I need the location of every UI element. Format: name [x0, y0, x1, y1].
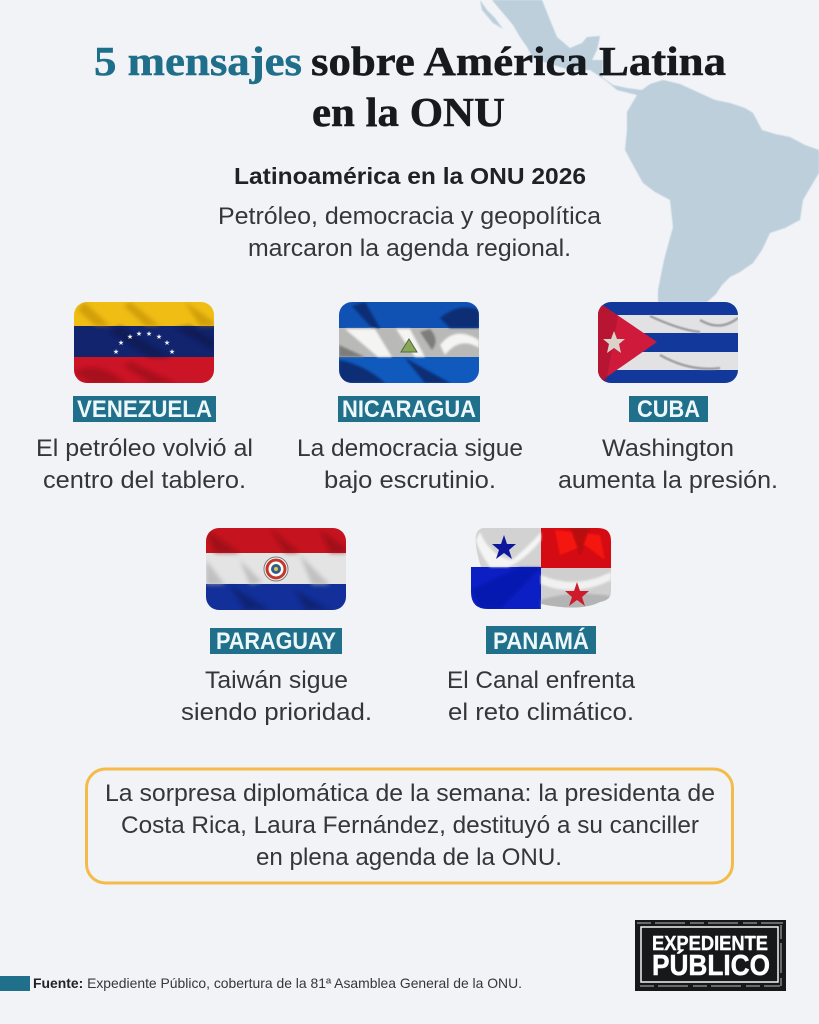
logo: Expediente Público: EXPEDIENTE — [652, 933, 768, 955]
label: Paraguay: PARAGUAY — [216, 628, 336, 655]
callout: en plena agenda de la ONU. — [256, 844, 562, 871]
intro text: marcaron la agenda regional. — [248, 235, 571, 262]
text: Paraguay — [181, 667, 372, 726]
source note: Fuente: Expediente Público, cobertura de la 81ª Asamblea General de la ONU. — [33, 975, 522, 991]
intro text — [218, 203, 602, 262]
label: Venezuela: VENEZUELA — [77, 396, 212, 423]
title: sobre América Latina — [311, 38, 726, 84]
text: Cuba: aumenta la presión. — [558, 467, 778, 494]
panel: Paraguay — [181, 528, 372, 726]
text: Panamá — [447, 667, 636, 726]
icon: flag of Nicaragua — [339, 302, 479, 383]
text: Paraguay: Taiwán sigue — [205, 667, 348, 694]
text: Venezuela: centro del tablero. — [43, 467, 246, 494]
text: Cuba: Washington — [602, 435, 734, 462]
icon: flag of Venezuela: ★ — [136, 330, 142, 338]
callout: La sorpresa diplomática de la semana: la presidenta de — [105, 780, 715, 807]
text: Panamá: el reto climático. — [448, 699, 634, 726]
text: Nicaragua — [297, 435, 523, 494]
title: 5 mensajes — [94, 38, 302, 84]
text: Panamá: El Canal enfrenta — [447, 667, 636, 694]
title — [94, 38, 726, 135]
callout — [86, 769, 732, 883]
label: Nicaragua: NICARAGUA — [342, 396, 476, 423]
panel: Venezuela — [36, 302, 253, 494]
text: Venezuela: El petróleo volvió al — [36, 435, 253, 462]
subtitle heading: Latinoamérica en la ONU 2026 — [234, 163, 586, 189]
callout: Costa Rica, Laura Fernández, destituyó a su canciller — [121, 812, 699, 839]
intro text: Petróleo, democracia y geopolítica — [218, 203, 602, 230]
logo: Expediente Público — [635, 920, 786, 991]
icon: flag of Venezuela: ★ — [118, 339, 124, 347]
icon: flag of Venezuela: ★ — [156, 333, 162, 341]
panel: Nicaragua — [297, 302, 523, 494]
icon: flag of Paraguay — [206, 528, 346, 610]
icon: flag of Venezuela: ★ — [113, 348, 119, 356]
logo: Expediente Público: PÚBLICO — [652, 948, 770, 982]
text: Cuba — [558, 435, 778, 494]
text: Venezuela — [36, 435, 253, 494]
icon: flag of Venezuela: ★ — [164, 339, 170, 347]
text: Paraguay: siendo prioridad. — [181, 699, 372, 726]
title: en la ONU — [312, 89, 505, 135]
icon: flag of Venezuela: ★ — [127, 333, 133, 341]
icon: flag of Venezuela: ★ — [146, 330, 152, 338]
map of Latin America — [480, 0, 819, 302]
icon: flag of Cuba — [598, 302, 738, 383]
label: Panamá: PANAMÁ — [493, 627, 589, 655]
text: Nicaragua: La democracia sigue — [297, 435, 523, 462]
panel: Cuba — [558, 302, 778, 494]
label: Cuba: CUBA — [637, 396, 700, 423]
icon: flag of Venezuela — [74, 302, 214, 383]
text: Nicaragua: bajo escrutinio. — [324, 467, 496, 494]
icon: flag of Venezuela: ★ — [169, 348, 175, 356]
icon: flag of Panama — [471, 528, 611, 610]
panel: Panamá — [447, 528, 636, 726]
